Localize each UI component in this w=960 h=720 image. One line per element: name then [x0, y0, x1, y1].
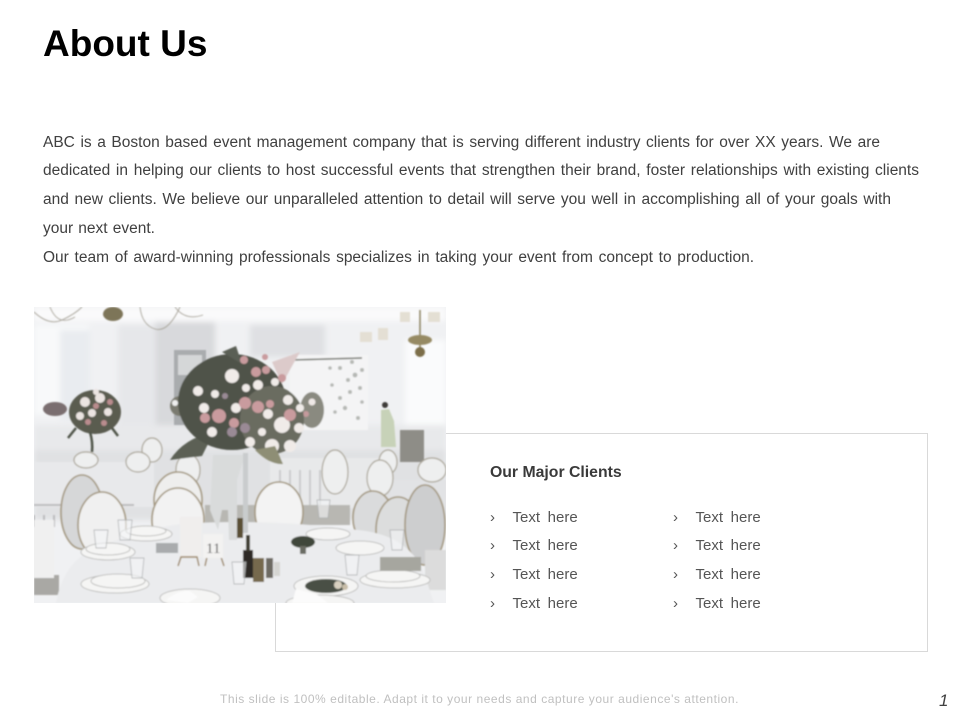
- footer note: This slide is 100% editable. Adapt it to your needs and capture your audience's attention.: [220, 692, 739, 706]
- bottles and cruets: [232, 518, 243, 538]
- butterfly wall: [290, 355, 368, 430]
- list: clients column 1: Text here: [512, 509, 578, 526]
- back tables: [34, 462, 154, 507]
- text block: company description: [43, 134, 919, 266]
- gift boxes: [380, 557, 421, 571]
- glass vase: [210, 455, 245, 540]
- list: clients column 1: [490, 509, 578, 612]
- left back flower arrangement: [69, 390, 121, 434]
- list: clients column 2: [673, 509, 761, 612]
- list: clients column 2: ›: [673, 509, 678, 526]
- front chairs: [61, 472, 445, 565]
- woman in green dress: [382, 402, 388, 408]
- back chairs: [74, 438, 446, 496]
- front table: [56, 522, 434, 603]
- text block: company description: and new clients. We believe our unparalleled attention to detail will serve you well in accomplishing all of your goals with: [43, 191, 891, 208]
- list: clients column 2: ›: [673, 595, 678, 612]
- list: clients column 1: Text here: [512, 566, 578, 583]
- list: clients column 2: ›: [673, 566, 678, 583]
- small plant bowl: [291, 536, 315, 548]
- panel: major clients: [275, 433, 928, 652]
- list: clients column 1: ›: [490, 566, 495, 583]
- photo: banquet hall table setting with floral centerpiece: [34, 307, 446, 603]
- list: clients column 1: Text here: [512, 595, 578, 612]
- table number card: [180, 517, 202, 557]
- list: clients column 2: Text here: [696, 537, 761, 554]
- list: clients column 2: Text here: [696, 509, 761, 526]
- heading: our major clients: Our Major Clients: [490, 464, 622, 481]
- list: clients column 1: ›: [490, 509, 495, 526]
- text block: company description: Our team of award-winning professionals specializes in taking your event from concept to production.: [43, 249, 754, 266]
- list: clients column 1: ›: [490, 595, 495, 612]
- list: clients column 1: Text here: [512, 537, 578, 554]
- title: About Us: [43, 23, 207, 64]
- page number: 1: [939, 691, 948, 710]
- door: [174, 350, 206, 425]
- list: clients column 2: ›: [673, 537, 678, 554]
- main floral centerpiece: [170, 346, 304, 464]
- chandeliers: [34, 307, 203, 330]
- text block: company description: dedicated in helping our clients to host successful events that strengthen their brand, foster relationships with existing clients: [43, 162, 919, 179]
- text block: company description: ABC is a Boston based event management company that is serving different industry clients for over XX years. We are: [43, 134, 880, 151]
- list: clients column 2: Text here: [696, 566, 761, 583]
- text block: company description: your next event.: [43, 220, 155, 237]
- wine glasses: [94, 500, 404, 584]
- list: clients column 1: ›: [490, 537, 495, 554]
- photo: banquet hall table setting with floral centerpiece: 11: [206, 541, 220, 557]
- place settings: [81, 526, 430, 611]
- list: clients column 2: Text here: [696, 595, 761, 612]
